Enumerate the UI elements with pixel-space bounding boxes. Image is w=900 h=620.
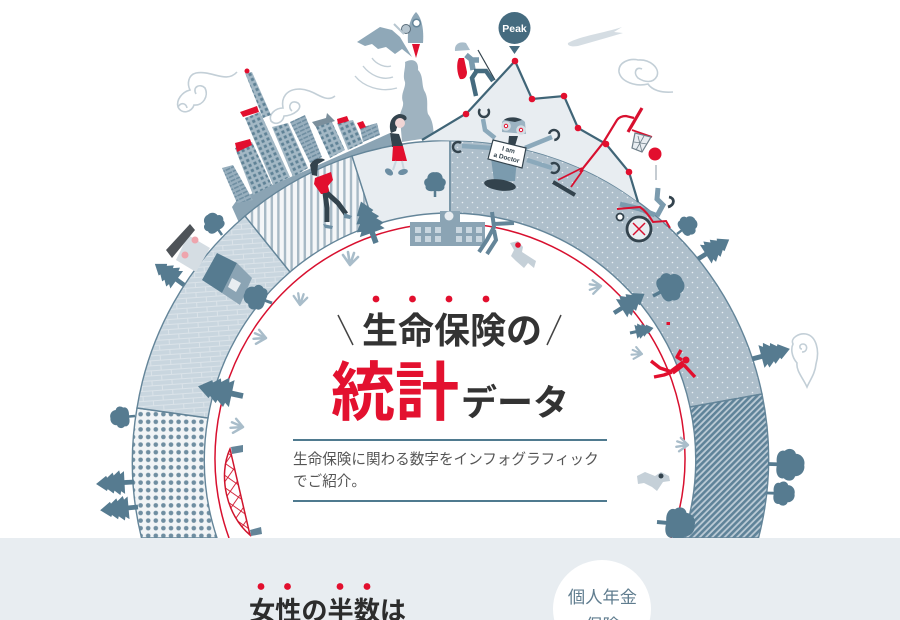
robot [453,109,561,193]
city buildings [222,68,380,203]
description: でご紹介。 [293,473,366,490]
band: small dots [450,140,762,407]
peak pin [498,12,530,54]
title slashes [338,315,561,345]
trees [95,172,805,542]
ufo [357,27,412,57]
wheelchair user [616,165,673,241]
rule bottom [293,500,607,502]
house: roof and red door [166,224,210,272]
city base block [232,133,394,225]
smoke plume [400,60,434,142]
bottom panel [0,538,900,620]
title: line 2 dark: データ [461,382,569,423]
clouds [178,60,818,387]
rocket [394,12,423,58]
ring: life stage bands [132,140,769,538]
hanging person [479,212,514,254]
climber [455,42,495,96]
band: brick [137,216,290,418]
ball [648,148,662,160]
band: vertical stripes [245,156,374,272]
school building [410,211,485,246]
grass tufts [230,252,688,451]
description: 生命保険に関わる数字をインフォグラフィック [293,451,599,468]
falling red man [651,322,695,377]
peak pin: Peak [502,23,527,35]
dog: grey with dark ear [637,472,670,491]
robot: I am [501,146,516,156]
robot: a Doctor [493,152,521,165]
house: grey cabin [202,253,252,305]
heading dots [258,583,370,590]
title dots [373,296,489,302]
dog: white with red ear [510,241,536,268]
girl walking [384,114,409,177]
red lattice bridge [224,445,262,536]
band: plain light [352,140,450,225]
title: line 1: 生命保険の [362,310,542,351]
basketball hoop [553,108,652,195]
comet [568,27,623,46]
rule top [293,439,607,441]
title: line 2 red: 統計 [331,357,459,429]
signal waves [355,58,397,90]
band: diagonal stripes [683,394,769,538]
band: dots [132,408,217,538]
badge label: 個人年金 [568,587,637,607]
circle badge [553,560,651,620]
mountain [422,58,638,202]
runner [310,158,352,229]
red inner arc [215,223,685,538]
